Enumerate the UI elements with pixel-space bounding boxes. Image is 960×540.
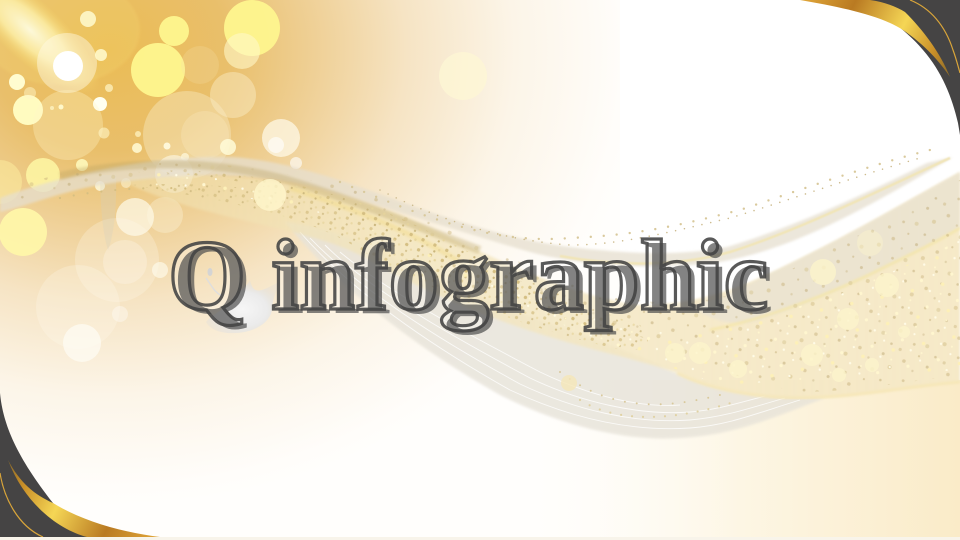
bokeh circles on the wave bbox=[254, 179, 910, 391]
title base fill: Q infographic bbox=[168, 219, 768, 331]
wave: lower grey striped ribbon bbox=[285, 222, 825, 439]
corner ornament: top right bbox=[800, 0, 960, 135]
title shadow: Q infographic bbox=[173, 223, 773, 335]
corner ornament: bottom left bbox=[0, 393, 960, 540]
icon: milk splash bbox=[206, 268, 280, 333]
bokeh light circles bbox=[0, 0, 487, 362]
wave: main gold body bbox=[120, 172, 960, 398]
icon: vertical translucent drip bbox=[100, 175, 116, 250]
wave: top swoosh band bbox=[0, 157, 960, 398]
wave: grey upper right ribbon bbox=[690, 172, 960, 323]
title outline: Q infographic bbox=[168, 219, 768, 331]
title: Q infographic bbox=[168, 219, 773, 335]
gold dust particles on the waves bbox=[20, 150, 960, 417]
